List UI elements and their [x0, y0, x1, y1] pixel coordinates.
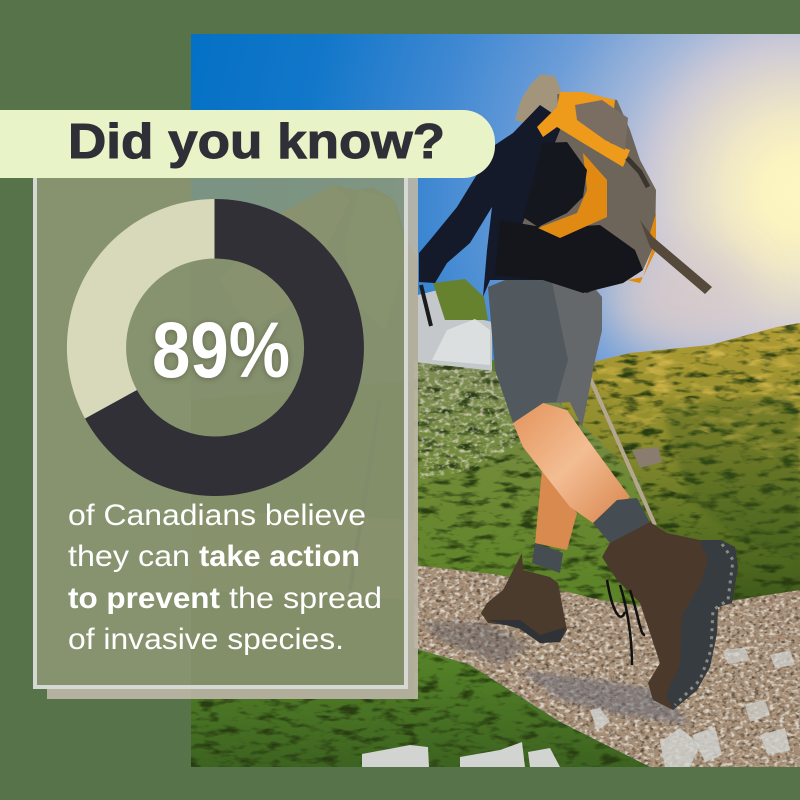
- front leg: [513, 403, 630, 523]
- back boot: [481, 553, 567, 643]
- ground base: [492, 360, 562, 406]
- back leg: [535, 470, 577, 550]
- foreground white rocks: [362, 447, 795, 767]
- backpack orange top flap: [537, 92, 630, 167]
- body text: to prevent: [68, 582, 220, 615]
- backpack black pocket: [523, 142, 587, 227]
- hillside grass, right: [560, 323, 800, 620]
- body text: of invasive species.: [68, 623, 344, 656]
- photo sky with sun glow: [191, 34, 800, 767]
- slope under the panel: [191, 420, 414, 699]
- foreground grass: [191, 648, 650, 767]
- front boot: [602, 522, 738, 710]
- rock and grass knoll, left of hiker: [418, 279, 492, 372]
- hiker: [419, 74, 738, 710]
- trekking pole, front: [590, 378, 655, 525]
- hair: [515, 74, 563, 125]
- boot laces: [607, 580, 645, 665]
- front boot sole: [666, 540, 738, 710]
- panel shadow: [47, 178, 418, 699]
- jacket: [419, 105, 594, 297]
- body text: they can: [68, 540, 190, 573]
- backpack body: [520, 94, 656, 293]
- donut segment: dark: [85, 199, 364, 496]
- donut value: 89%: [152, 305, 290, 394]
- body text: of Canadians believe: [68, 499, 366, 532]
- body text: [68, 499, 382, 656]
- gravel path: [414, 565, 800, 767]
- pink haze low in the sky: [610, 250, 750, 350]
- back sock: [532, 543, 563, 573]
- body text: the spread: [229, 582, 382, 615]
- panel: translucent statistic card: [35, 170, 406, 687]
- donut chart: [67, 199, 364, 496]
- body text: take action: [199, 540, 360, 573]
- backpack orange lower trim: [627, 213, 656, 283]
- backpack orange side panel: [538, 153, 607, 238]
- title banner: [0, 110, 495, 178]
- distant mountain behind the panel: [191, 185, 418, 420]
- backpack strap: [640, 220, 712, 294]
- hand strap: [421, 285, 431, 326]
- title: Did you know?: [68, 115, 445, 169]
- donut segment: light: [67, 199, 215, 418]
- mid slope grass and rock: [414, 362, 660, 610]
- shorts: [488, 278, 602, 427]
- photo: hiker on a mountain trail: [191, 34, 800, 767]
- front sock: [593, 498, 652, 543]
